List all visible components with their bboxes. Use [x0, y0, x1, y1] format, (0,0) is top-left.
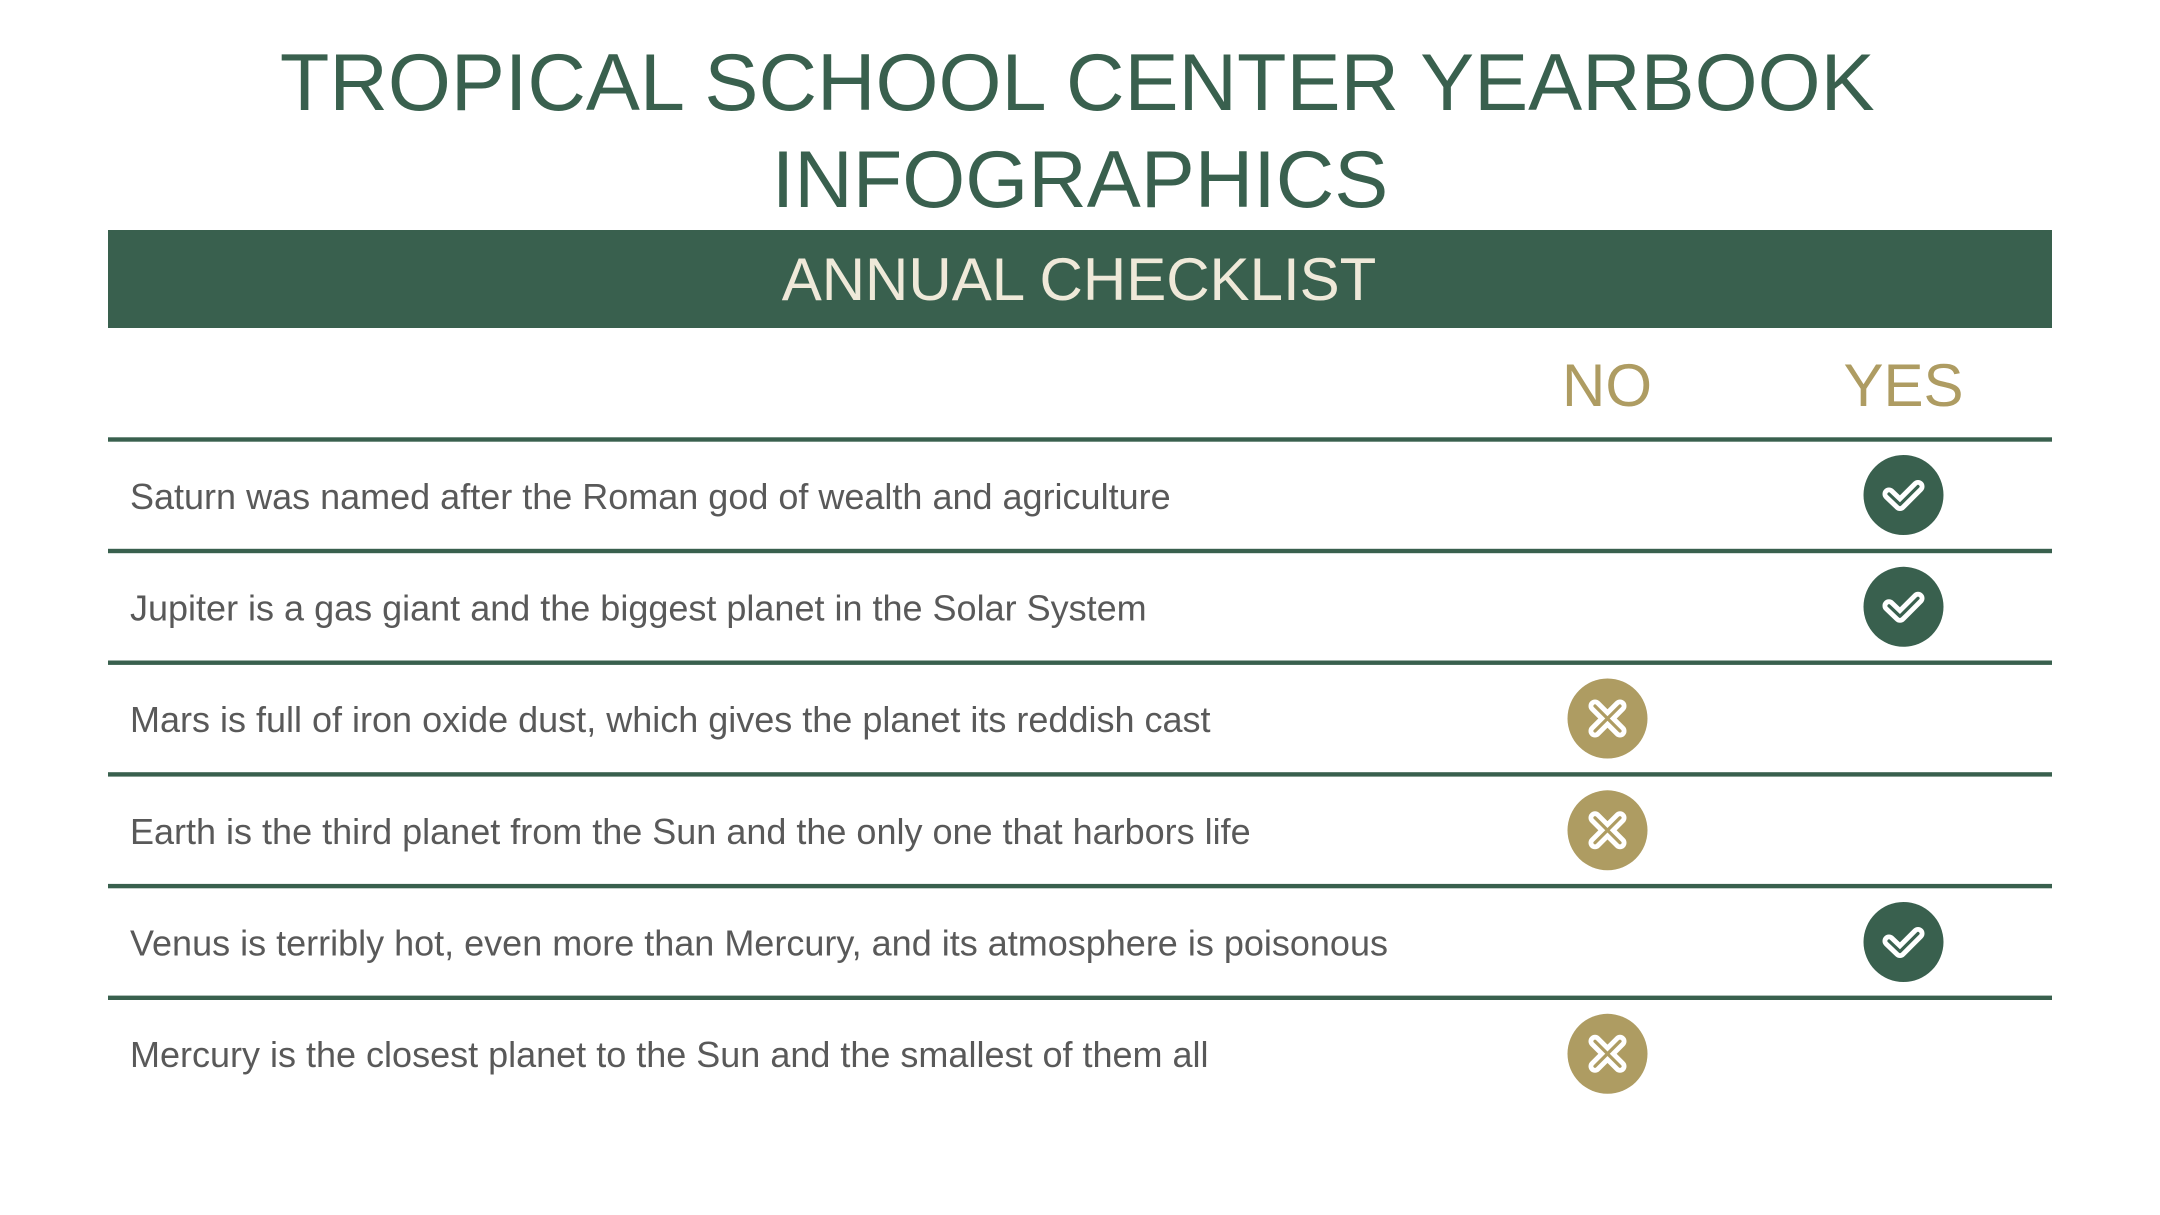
row: Jupiter [108, 549, 2052, 647]
row: Mars [108, 660, 2052, 758]
row: Venus [108, 884, 2052, 982]
row: Venus: Venus is terribly hot, even more than Mercury, and its atmosphere is poisonous [130, 922, 1388, 964]
icon: cross [1568, 678, 1648, 758]
heading: annual checklist: ANNUAL CHECKLIST [782, 246, 1376, 313]
row: Earth [108, 772, 2052, 870]
icon: check [1864, 567, 1944, 647]
icon: cross [1568, 1014, 1648, 1094]
column heading: yes: YES [1843, 352, 1964, 419]
row: Saturn [108, 437, 2052, 535]
title: INFOGRAPHICS [772, 135, 1388, 225]
icon: check [1864, 455, 1944, 535]
row: Mercury [108, 996, 2052, 1094]
row: Mercury: Mercury is the closest planet to the Sun and the smallest of them all [130, 1034, 1209, 1075]
panel: annual checklist banner [108, 230, 2052, 328]
row: Jupiter: Jupiter is a gas giant and the biggest planet in the Solar System [130, 588, 1147, 628]
title: TROPICAL SCHOOL CENTER YEARBOOK [280, 38, 1875, 128]
row: Saturn: Saturn was named after the Roman god of wealth and agriculture [130, 476, 1171, 517]
icon: check [1864, 902, 1944, 982]
column heading: no: NO [1562, 352, 1652, 419]
row: Earth: Earth is the third planet from the Sun and the only one that harbors life [130, 811, 1251, 852]
icon: cross [1568, 790, 1648, 870]
row: Mars: Mars is full of iron oxide dust, which gives the planet its reddish cast [130, 699, 1211, 740]
